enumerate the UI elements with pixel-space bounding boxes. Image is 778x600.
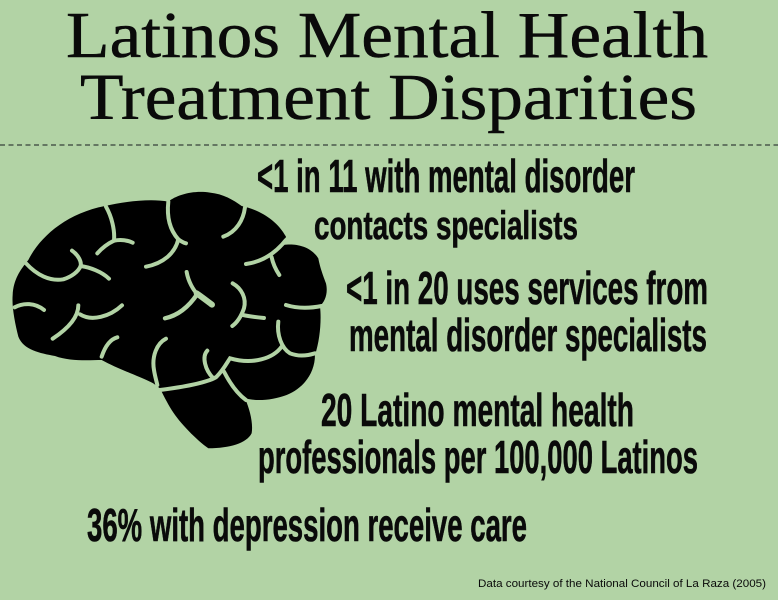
icon: brain xyxy=(12,192,327,448)
text block: professionals statistic xyxy=(258,384,698,483)
text block: contacts specialists statistic: contacts specialists xyxy=(314,204,578,248)
text block: uses services statistic xyxy=(346,262,708,361)
title: Latinos Mental Health xyxy=(66,0,708,72)
title: Treatment Disparities xyxy=(80,61,697,134)
source credit: Data courtesy of the National Council of La Raza (2005) xyxy=(478,578,766,590)
text block: contacts specialists statistic xyxy=(257,150,635,248)
title xyxy=(66,0,708,134)
